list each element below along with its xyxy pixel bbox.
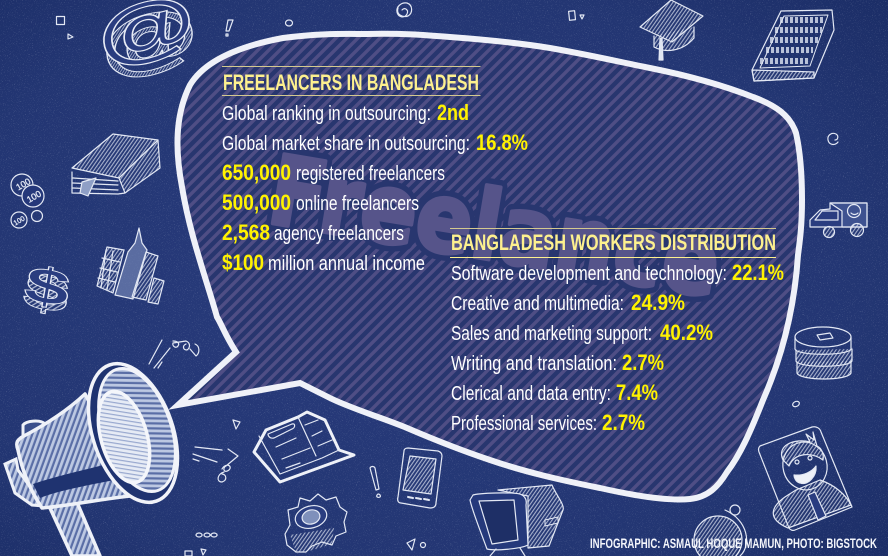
- megaphone dark band: [33, 465, 114, 498]
- icon: coins: 100: [25, 189, 43, 205]
- stat: global ranking: 2nd: [437, 100, 469, 125]
- icon: portrait of a man: [759, 427, 852, 530]
- stat: global market share: Global market share in outsourcing:: [222, 132, 470, 155]
- stat: professional services: 2.7%: [602, 410, 645, 435]
- icon: abacus: [752, 10, 834, 81]
- icon: delivery van: [810, 203, 867, 238]
- stat: online freelancers: 500,000: [222, 190, 291, 215]
- stat: registered freelancers: registered freelancers: [296, 162, 445, 185]
- icon: small square and triangle: [56, 16, 73, 39]
- heading: freelancers in Bangladesh: FREELANCERS IN BANGLADESH: [223, 70, 479, 95]
- stat: global market share: 16.8%: [476, 130, 528, 155]
- megaphone nub: [23, 421, 45, 436]
- icon: lower exclamation mark: [370, 466, 380, 497]
- heading: workers distribution: BANGLADESH WORKERS DISTRIBUTION: [451, 230, 776, 255]
- stat: sales and marketing: Sales and marketing support:: [451, 322, 652, 345]
- stat: annual income: $100: [222, 250, 264, 275]
- stat: sales and marketing: 40.2%: [660, 320, 713, 345]
- icon: coins: 100: [13, 215, 27, 227]
- stat: clerical and data entry: Clerical and data entry:: [451, 382, 611, 405]
- icon: desktop computer: [470, 485, 563, 556]
- panel: freelancers in Bangladesh: [222, 66, 528, 275]
- icon: gear: [285, 494, 347, 552]
- stat: software development: Software development and technology:: [451, 262, 727, 285]
- stat: agency freelancers: 2,568: [222, 220, 270, 245]
- icon: coins: [11, 174, 44, 228]
- stat: creative and multimedia: Creative and multimedia:: [451, 292, 624, 315]
- icon: coins: 100: [14, 176, 32, 192]
- icon: city buildings: [97, 228, 164, 304]
- icon: megaphone: [5, 352, 194, 556]
- icon: globe: [694, 505, 747, 556]
- icon: small phone shape and triangle: [569, 11, 584, 20]
- stat: writing and translation: Writing and translation:: [451, 352, 617, 375]
- watermark: Freelance word: Freelance: [261, 134, 728, 320]
- icon: top exclamation mark: [226, 20, 233, 36]
- icon: smartphone: [398, 448, 442, 508]
- icon: open book: [254, 412, 354, 482]
- icon: right spiral: [828, 133, 838, 144]
- icon: small triangle and ring: [233, 420, 426, 550]
- panel: speech bubble: [177, 34, 802, 500]
- stat: registered freelancers: 650,000: [222, 160, 291, 185]
- megaphone throat: [89, 385, 159, 489]
- icon: closed book: [72, 134, 160, 196]
- icon: coin stack: [792, 327, 852, 408]
- stat: creative and multimedia: 24.9%: [631, 290, 685, 315]
- stat: online freelancers: [222, 190, 419, 215]
- panel: Bangladesh workers distribution: [450, 228, 784, 435]
- icon: doodle arrows near megaphone: [149, 340, 238, 556]
- icon: dollar sign: $: [20, 256, 74, 318]
- stat: agency freelancers: agency freelancers: [274, 222, 404, 245]
- megaphone body: [17, 394, 140, 508]
- megaphone rear cap: [5, 459, 44, 506]
- icon: dollar sign: $: [19, 262, 73, 324]
- stat: software development: 22.1%: [732, 260, 784, 285]
- stat: clerical and data entry: 7.4%: [616, 380, 658, 405]
- megaphone handle: [50, 500, 100, 556]
- stat: agency freelancers: [222, 220, 404, 245]
- megaphone bell interior: [84, 358, 190, 502]
- megaphone mouth rim: [72, 352, 194, 514]
- stat: professional services: Professional services:: [451, 412, 597, 435]
- icon: top spiral: [397, 3, 412, 17]
- stat: registered freelancers: [222, 160, 445, 185]
- stat: annual income: [222, 250, 425, 275]
- stat: writing and translation: 2.7%: [622, 350, 664, 375]
- stat: annual income: million annual income: [268, 252, 425, 275]
- icon: small ring: [286, 20, 292, 26]
- watermark: Freelance word: Freelance: [261, 134, 728, 320]
- stat: online freelancers: online freelancers: [296, 192, 419, 215]
- stat: global ranking: Global ranking in outsourcing:: [222, 102, 431, 125]
- icon: graduation cap: [640, 0, 703, 60]
